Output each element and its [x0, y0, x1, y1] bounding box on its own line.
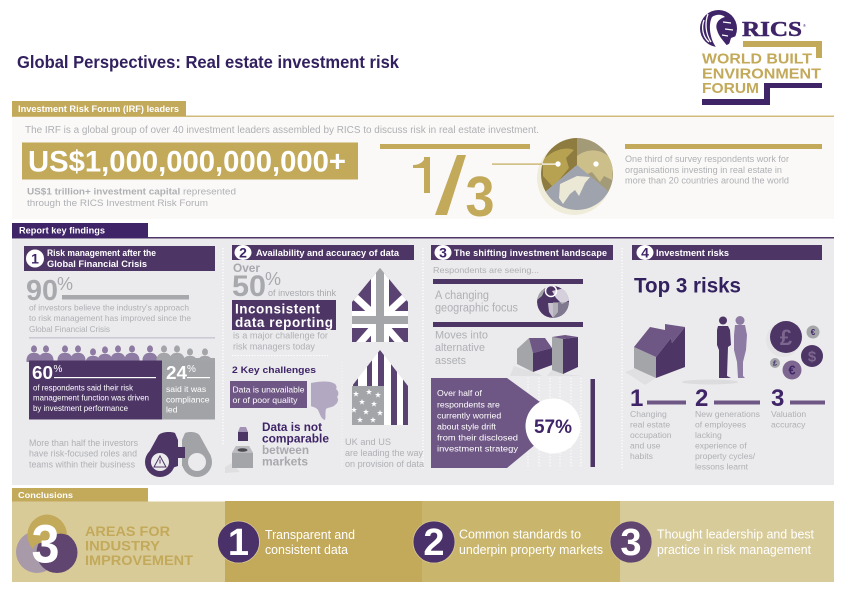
icon: UK flag house: [352, 268, 408, 342]
panel 2: availability of data: [225, 244, 424, 473]
risk 3: valuation accuracy: 3: [771, 385, 784, 412]
heading: Conclusions: [12, 488, 148, 502]
conclusion 2: [413, 521, 603, 564]
callout: 60%: [29, 360, 162, 420]
heading 1: Global Financial Crisis: [47, 259, 147, 269]
risk 1: changing occupation: [630, 385, 686, 461]
panel 3: shifting investment landscape: [431, 244, 613, 468]
text: 90% description: Global Financial Crisis: [29, 324, 111, 334]
text: respondents are seeing: Respondents are seeing...: [433, 265, 539, 275]
risk 2: new generations: lessons learnt: [695, 462, 749, 472]
callout: style drift 57%: investment strategy: [437, 444, 519, 454]
icon: thumbs down: [311, 382, 338, 420]
icon: small globe: [537, 286, 569, 318]
callout: data unavailable: [230, 381, 307, 408]
text: UK and US leading: on provision of data: [345, 459, 424, 469]
icon: coins: [766, 321, 823, 380]
text: UK and US leading: UK and US: [345, 437, 391, 447]
icon: coins: €: [811, 328, 816, 337]
statistic: over 50%: 50: [232, 270, 266, 303]
callout: style drift 57%: from their disclosed: [437, 432, 518, 442]
text: changing geographic focus: [435, 290, 518, 314]
callout: inconsistent data reporting: Inconsistent: [235, 302, 320, 316]
conclusion 3: practice in risk management: [657, 542, 811, 557]
logo: RICS World Built Environment Forum: ®: [803, 23, 806, 28]
callout: 60%: by investment performance: [33, 404, 129, 413]
callout: 24%: [162, 360, 215, 420]
conclusion 2: 2: [423, 522, 445, 564]
heading: Investment Risk Forum leaders: [12, 101, 186, 116]
heading 2: Availability and accuracy of data: [256, 248, 400, 258]
logo: RICS World Built Environment Forum: WORLD BUILT: [702, 50, 812, 68]
risk 1: changing occupation: real estate: [630, 420, 670, 430]
icon: coins: $: [808, 348, 817, 366]
text: major challenge: [233, 330, 328, 352]
callout: style drift 57%: Over half of: [437, 388, 482, 398]
text: major challenge: risk managers today: [233, 342, 316, 352]
risk 1: changing occupation: occupation: [630, 430, 672, 440]
statistic: 90%: %: [57, 273, 73, 294]
heading 3: [431, 244, 613, 260]
text: moves into alternative assets: [435, 330, 488, 367]
heading: Conclusions: Conclusions: [18, 490, 73, 500]
risk 3: valuation accuracy: accuracy: [771, 420, 806, 430]
title: Global Perspectives: Real estate investment risk: [17, 52, 399, 72]
heading 2: [232, 244, 414, 260]
text: areas for industry improvement: INDUSTRY: [85, 538, 160, 554]
risk 2: new generations: of employees: [695, 420, 746, 430]
text: moves into alternative assets: assets: [435, 355, 466, 367]
heading 4: 4: [641, 244, 649, 260]
text: risk-focused roles: [29, 438, 138, 470]
conclusion 3: Thought leadership and best: [657, 526, 814, 542]
statistic: over 50%: of investors think: [268, 288, 337, 298]
statistic: one third: 3: [466, 165, 494, 229]
text: data is not comparable: between: [262, 443, 309, 457]
conclusion 2: underpin property markets: [459, 542, 603, 557]
callout: style drift 57%: respondents are: [437, 400, 500, 410]
conclusion 3: 3: [620, 522, 642, 564]
text: data is not comparable: comparable: [262, 432, 329, 446]
heading: Report key findings: Report key findings: [19, 226, 105, 236]
text: data is not comparable: [262, 420, 329, 468]
callout: 24%: %: [187, 364, 196, 375]
panel: Investment Risk Forum leaders: [12, 101, 834, 229]
callout: 24%: led: [166, 404, 178, 414]
heading: Report key findings: [12, 223, 148, 238]
statistic: over 50%: %: [265, 269, 281, 289]
conclusion 1: 1: [228, 522, 249, 564]
logo: RICS World Built Environment Forum: RICS: [742, 17, 802, 41]
logo: RICS World Built Environment Forum: FORUM: [702, 80, 759, 97]
heading 1: Risk management after the: [47, 248, 156, 258]
icon: coins: €: [789, 364, 796, 378]
callout: style drift 57%: 57%: [534, 417, 572, 438]
text: major challenge: is a major challenge for: [233, 330, 328, 340]
icon: RICS lion: [700, 10, 739, 48]
statistic: over 50%: Over: [233, 261, 260, 275]
risk 2: new generations: [695, 385, 760, 472]
callout: style drift 57%: currently worried: [437, 410, 501, 420]
icon: coins: £: [780, 325, 793, 350]
callout: 24%: said it was: [166, 384, 206, 394]
icon: crowd of people: [26, 345, 215, 365]
text: 90% description: [29, 302, 191, 334]
text: moves into alternative assets: Moves into: [435, 330, 488, 342]
text: areas for industry improvement: IMPROVEMENT: [85, 553, 194, 568]
conclusion 1: Transparent and: [265, 527, 355, 542]
text: investment capital: US$1 trillion+ investment capital represented: [27, 186, 236, 196]
risk 1: changing occupation: and use: [630, 440, 661, 450]
callout: data unavailable: or of poor quality: [232, 395, 298, 405]
conclusion 1: consistent data: [265, 542, 349, 557]
heading 1: [24, 246, 215, 271]
callout: 60%: management function was driven: [33, 394, 149, 402]
heading: 2 key challenges: 2 Key challenges: [232, 365, 316, 376]
text: one third description: [625, 154, 789, 186]
callout: 60%: %: [54, 364, 62, 375]
icon: three overlapping circles: [16, 514, 78, 574]
panel 4: investment risks: [625, 244, 825, 472]
statistic: one third: [380, 144, 530, 229]
callout: inconsistent data reporting: [232, 300, 336, 330]
text: through the forum: through the RICS Investment Risk Forum: [27, 198, 208, 208]
icon: US flag house: [351, 350, 408, 425]
panel: Conclusions: [12, 488, 834, 582]
text: one third description: One third of survey respondents work for: [625, 154, 789, 164]
heading: top 3 risks: Top 3 risks: [634, 274, 741, 298]
callout: 24%: 24: [166, 362, 188, 383]
icon: coins: £: [773, 360, 777, 368]
statistic: 90%: 90: [26, 275, 58, 307]
callout: inconsistent data reporting: data reporting: [235, 315, 333, 330]
risk 1: changing occupation: Changing: [630, 409, 667, 419]
conclusion 2: Common standards to: [459, 526, 581, 542]
callout: 60%: 60: [32, 362, 53, 383]
text: changing geographic focus: A changing: [435, 290, 489, 302]
text: risk-focused roles: teams within their business: [29, 460, 135, 470]
callout: style drift 57%: about style drift: [437, 422, 496, 432]
callout: 60%: of respondents said their risk: [33, 384, 134, 392]
text: 90% description: to risk management has improved since the: [29, 313, 191, 323]
statistic: 90%: [26, 273, 189, 307]
risk 3: valuation accuracy: Valuation: [771, 409, 806, 419]
icon: factory building: [625, 324, 685, 385]
conclusion 3: [610, 521, 814, 564]
risk 2: new generations: property cycles/: [695, 451, 756, 461]
icon: buildings: [510, 335, 582, 376]
text: one third description: more than 20 countries around the world: [625, 176, 789, 186]
heading 1: 1: [31, 250, 39, 266]
risk 1: changing occupation: 1: [630, 385, 643, 412]
callout: 24%: compliance: [166, 394, 210, 404]
text: risk-focused roles: have risk-focused roles and: [29, 448, 137, 458]
panel 1: risk management: [24, 246, 215, 477]
callout: style drift 57%: [431, 378, 580, 468]
risk 1: changing occupation: habits: [630, 451, 653, 461]
text: areas for industry improvement: [85, 524, 194, 568]
panel: Report key findings: [12, 223, 834, 485]
icon: three overlapping circles: 3: [32, 514, 60, 574]
text: data is not comparable: markets: [262, 454, 308, 468]
heading 3: The shifting investment landscape: [454, 248, 607, 258]
heading: Investment Risk Forum leaders: Investment Risk Forum (IRF) leaders: [18, 104, 179, 114]
risk 2: new generations: New generations: [695, 409, 760, 419]
risk 2: new generations: lacking: [695, 430, 722, 440]
text: data is not comparable: Data is not: [262, 420, 322, 434]
logo: RICS World Built Environment Forum: ENVIRONMENT: [702, 66, 821, 82]
heading 4: Investment risks: [656, 248, 729, 258]
callout: one trillion dollars: US$1,000,000,000,000+: [28, 146, 346, 178]
risk 3: valuation accuracy: [771, 385, 825, 430]
risk 2: new generations: 2: [695, 385, 708, 412]
text: 90% description: of investors believe the industry's approach: [29, 302, 189, 312]
text: UK and US leading: [345, 437, 424, 469]
icon: binoculars: [145, 432, 212, 477]
heading 3: 3: [439, 244, 447, 260]
icon: world globe pie: [492, 138, 613, 215]
text: one third description: organisations investing in real estate in: [625, 165, 782, 175]
heading 2: 2: [239, 244, 247, 260]
statistic: over 50%: [232, 261, 337, 303]
icon: puzzle boxes: [225, 427, 253, 473]
text: UK and US leading: are leading the way: [345, 448, 424, 458]
callout: data unavailable: Data is unavailable: [232, 384, 305, 394]
icon: two people: [682, 316, 747, 384]
text: changing geographic focus: geographic focus: [435, 302, 518, 314]
logo: RICS World Built Environment Forum: [700, 10, 822, 105]
heading 4: [632, 244, 822, 260]
conclusion 1: [218, 521, 355, 564]
text: IRF description: The IRF is a global group of over 40 investment leaders assembled by RICS to discuss risk in real estate investment.: [25, 125, 539, 136]
text: moves into alternative assets: alternative: [435, 342, 485, 354]
risk 2: new generations: experience of: [695, 440, 747, 450]
text: risk-focused roles: More than half the investors: [29, 438, 138, 448]
text: areas for industry improvement: AREAS FOR: [85, 524, 170, 539]
